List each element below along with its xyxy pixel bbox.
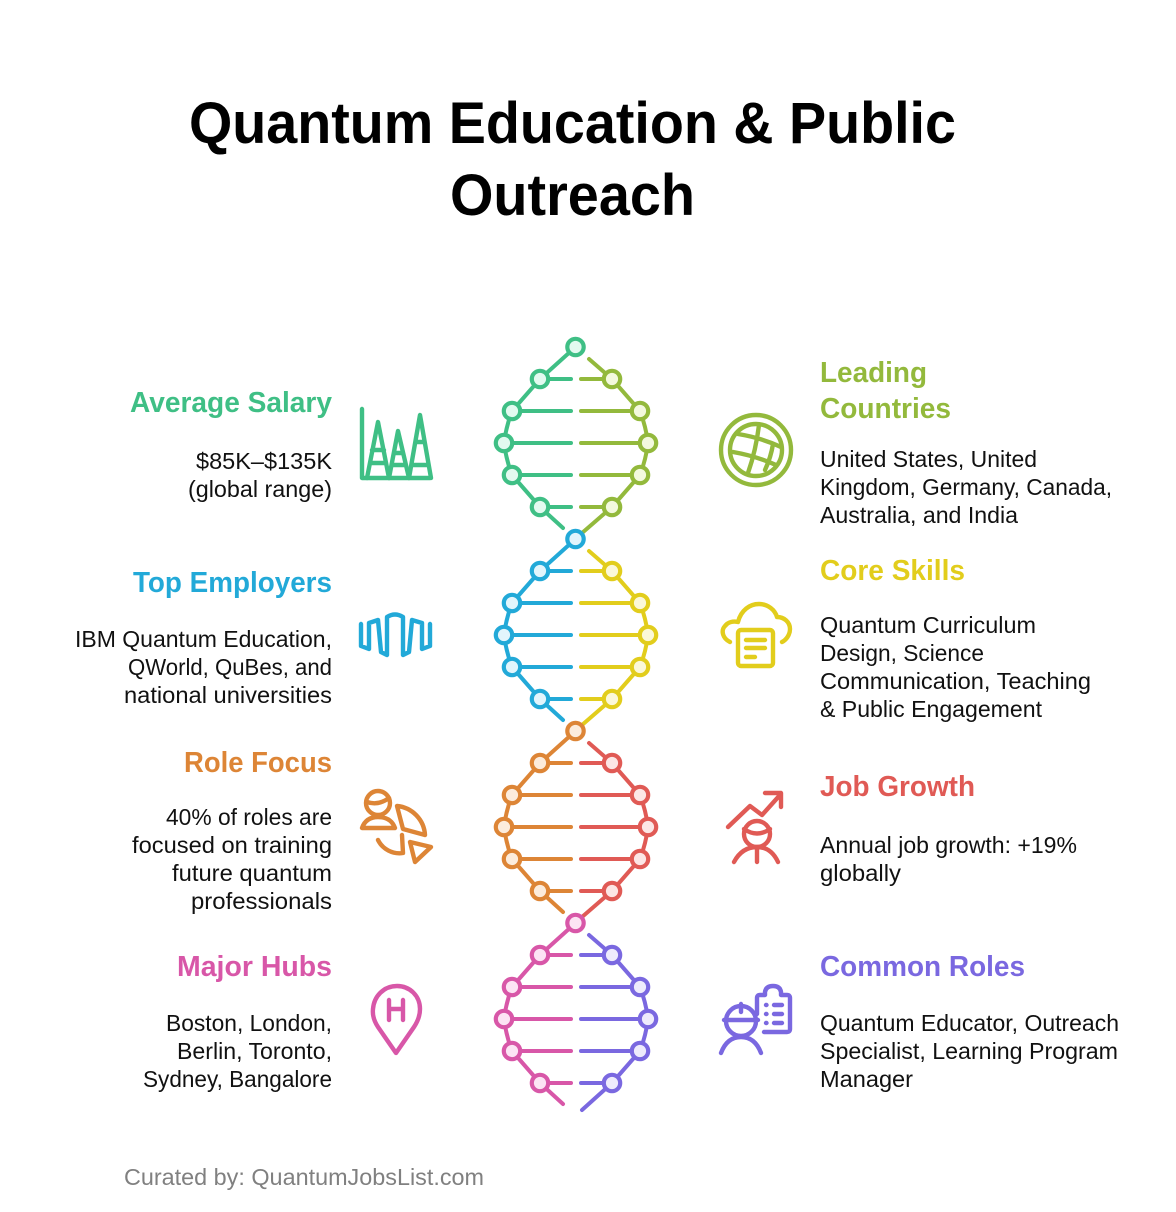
panel: role focus xyxy=(132,747,332,914)
heading: leading countries xyxy=(820,357,951,425)
heading: top employers: Top Employers xyxy=(133,567,332,599)
dna helix xyxy=(496,339,656,1110)
icon: globe xyxy=(721,415,791,485)
title: Quantum Education & Public xyxy=(189,91,956,156)
text: salary range: $85K–$135K xyxy=(196,448,332,474)
text: skills: Design, Science xyxy=(820,640,984,666)
heading: leading countries: Leading xyxy=(820,357,927,389)
text: role focus details: professionals xyxy=(191,888,332,914)
text: countries: Kingdom, Germany, Canada, xyxy=(820,474,1112,500)
heading: role focus: Role Focus xyxy=(184,747,332,779)
helix segment 4 xyxy=(496,915,656,1110)
panel: core skills xyxy=(820,555,1091,722)
title: Outreach xyxy=(450,163,695,228)
icon: cloud with document xyxy=(723,604,790,666)
icon: location pin xyxy=(373,986,420,1053)
text: hubs: Sydney, Bangalore xyxy=(143,1066,332,1092)
text: employers xyxy=(75,626,332,708)
icon: wave signal xyxy=(361,614,430,655)
heading: common roles: Common Roles xyxy=(820,951,1025,983)
text: skills: Quantum Curriculum xyxy=(820,612,1036,638)
text: employers: IBM Quantum Education, xyxy=(75,626,332,652)
helix segment 2 xyxy=(496,531,656,725)
text: countries xyxy=(820,446,1112,528)
text: role focus details: 40% of roles are xyxy=(166,804,332,830)
text: skills: & Public Engagement xyxy=(820,696,1042,722)
panel: leading countries xyxy=(820,357,1112,528)
heading: job growth: Job Growth xyxy=(820,771,975,803)
text: growth xyxy=(820,832,1077,886)
panel: common roles xyxy=(820,951,1119,1092)
panel: average salary xyxy=(130,387,332,502)
text: role focus details: future quantum xyxy=(172,860,332,886)
text: countries: United States, United xyxy=(820,446,1037,472)
text: roles: Manager xyxy=(820,1066,913,1092)
text: roles: Specialist, Learning Program xyxy=(820,1038,1118,1064)
text: role focus details xyxy=(132,804,332,914)
heading: average salary: Average Salary xyxy=(130,387,332,419)
text: skills: Communication, Teaching xyxy=(820,668,1091,694)
text: role focus details: focused on training xyxy=(132,832,332,858)
heading: core skills: Core Skills xyxy=(820,555,965,587)
text: roles xyxy=(820,1010,1119,1092)
text: growth: Annual job growth: +19% xyxy=(820,832,1077,858)
footer credit: Curated by: QuantumJobsList.com xyxy=(124,1164,484,1190)
text: hubs: Berlin, Toronto, xyxy=(177,1038,332,1064)
icon: bar peaks chart xyxy=(362,409,431,478)
heading: major hubs: Major Hubs xyxy=(177,951,332,983)
text: employers: national universities xyxy=(124,682,332,708)
text: hubs xyxy=(143,1010,332,1092)
text: skills xyxy=(820,612,1091,722)
text: employers: QWorld, QuBes, and xyxy=(128,654,332,680)
icon: person with growth arrow xyxy=(728,793,781,862)
icon: person with pie chart xyxy=(362,791,431,862)
text: roles: Quantum Educator, Outreach xyxy=(820,1010,1119,1036)
helix segment 1 xyxy=(496,339,656,533)
panel: major hubs xyxy=(143,951,332,1092)
text: salary range: (global range) xyxy=(188,476,332,502)
text: hubs: Boston, London, xyxy=(166,1010,332,1036)
icon: worker with clipboard xyxy=(721,986,790,1053)
panel: job growth xyxy=(820,771,1077,886)
text: countries: Australia, and India xyxy=(820,502,1019,528)
heading: leading countries: Countries xyxy=(820,393,951,425)
title xyxy=(189,91,956,228)
text: growth: globally xyxy=(820,860,901,886)
helix segment 3 xyxy=(496,723,656,917)
panel: top employers xyxy=(75,567,332,708)
text: salary range xyxy=(188,448,332,502)
